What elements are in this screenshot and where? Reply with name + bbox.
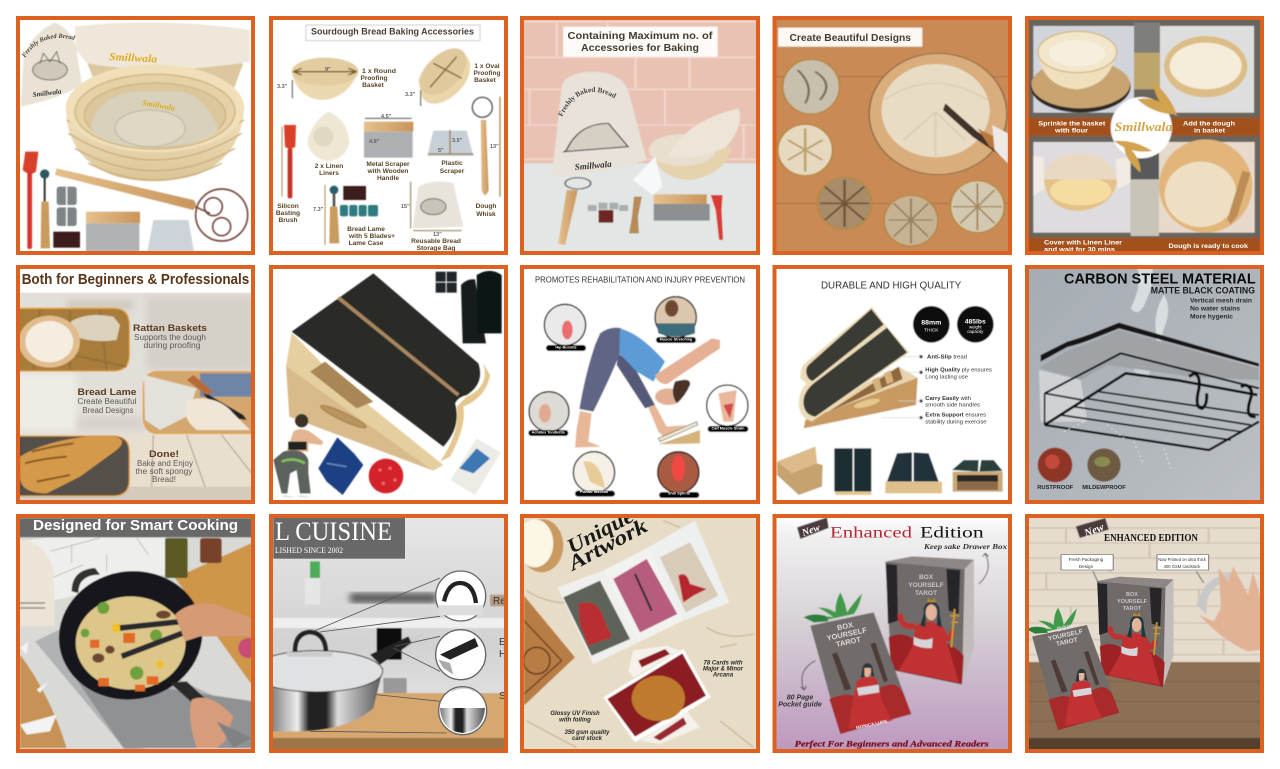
book title: guide: TAROT [835, 635, 862, 649]
callout: rattan baskets: Rattan Baskets [133, 323, 207, 334]
frame [1027, 516, 1262, 751]
labels: product names: 1 x Round [362, 68, 396, 75]
heading second line: Artwork [562, 513, 652, 576]
callout: packaging: Fresh Packaging [1069, 557, 1104, 562]
illustration: tarot box and guide book [772, 514, 1012, 754]
condition labels: Plantar fasciitis [580, 490, 608, 494]
labels: dimensions [277, 67, 499, 238]
callout: rattan baskets: Supports the dough [134, 333, 206, 342]
captions: Sprinkle the basket [1038, 120, 1106, 128]
labels: product names: Basting [276, 210, 300, 217]
annotation: deck [703, 661, 744, 678]
book title: box [908, 574, 944, 597]
callout: card stock: Now Printed on ultra thick [1158, 557, 1207, 562]
panel: four step guide [1024, 16, 1264, 256]
cropped labels: S [499, 691, 506, 702]
cropped labels [493, 596, 506, 702]
badges labels [1037, 485, 1126, 491]
condition labels: Muscle Stretching [660, 337, 693, 341]
labels: product names: Handle [377, 175, 399, 182]
labels: dimensions: 3.3" [277, 84, 288, 90]
labels: product names: with 5 Blades+ [348, 233, 395, 240]
labels: product names: Storage Bag [417, 245, 455, 252]
panel: designed for smart cooking [16, 514, 258, 753]
panel: enhanced edition brick [1025, 514, 1266, 753]
photo: black rack with water [1024, 265, 1264, 505]
book title: box: BOX [1126, 592, 1138, 598]
labels: product names: 1 x Oval [474, 63, 500, 70]
panel: carbon steel shelf [1024, 265, 1264, 505]
frame [522, 516, 758, 751]
frame [774, 18, 1010, 253]
captions: and wait for 30 mins [1044, 246, 1115, 254]
tag: new: New [1082, 521, 1106, 540]
feature list: High Quality ply ensures [925, 368, 992, 374]
frame [1027, 267, 1262, 502]
cropped labels: E [499, 637, 506, 648]
labels: product names: Basket [474, 77, 497, 84]
heading: Designed for Smart Cooking [33, 517, 238, 534]
labels: dimensions: 3.3" [405, 92, 416, 98]
book title: guide: YOURSELF [826, 625, 868, 643]
labels: product names: with Wooden [367, 168, 408, 175]
condition labels: Achilles Tendinitis [532, 430, 565, 434]
photo: board and feature badges [772, 265, 1012, 505]
panel: unique artwork tarot [517, 503, 760, 754]
condition labels: Calf Muscle Strain [712, 426, 745, 430]
label: liner brand: Smillwala [109, 51, 158, 66]
feature list: Carry Easily with [925, 396, 971, 402]
frame [774, 267, 1010, 502]
labels: dimensions: 7.3" [313, 207, 324, 213]
label: bag brand: Smillwala [574, 159, 613, 172]
photos: four steps [1024, 16, 1264, 256]
frame [1027, 18, 1262, 253]
book title: guide: BOX [836, 620, 854, 632]
heading: DURABLE AND HIGH QUALITY [821, 279, 961, 291]
book title: box: BOX [919, 574, 934, 581]
heading: Create Beautiful Designs [790, 33, 911, 44]
badge: 485lbs [965, 318, 986, 334]
annotation: deck: Major & Minor [703, 667, 744, 673]
annotation: guide [778, 695, 822, 709]
annotation: finish [550, 711, 610, 742]
logo: Smillwala [1114, 119, 1173, 134]
labels: product names: 2 x Linen [315, 163, 343, 170]
labels: product names: Reusable Bread [411, 238, 461, 245]
feature text [1190, 297, 1252, 320]
panel: containing maximum accessories [520, 16, 760, 255]
photo: tarot box on wooden table [1025, 514, 1266, 753]
heading: Enhanced [830, 524, 912, 541]
labels: product names: Bread Lame [347, 226, 385, 233]
feature text: More hygenic [1190, 313, 1233, 320]
feature text: Vertical mesh drain [1190, 297, 1252, 304]
annotation: finish: Glossy UV Finish [550, 711, 600, 717]
condition labels: Hip Bursitis [555, 345, 577, 349]
labels: dimensions: 15" [401, 204, 410, 210]
captions [1038, 120, 1248, 254]
condition labels [532, 337, 745, 495]
labels: product names: Metal Scraper [366, 161, 410, 168]
labels: product names: Plastic [441, 160, 463, 167]
heading [568, 32, 712, 53]
feature list: Anti-Slip tread [927, 354, 967, 360]
labels: product names [276, 63, 501, 252]
photo: slant board and accessories [273, 271, 502, 497]
brand name: L CUISINE [275, 517, 392, 546]
book title: guide: YOURSELF [1047, 628, 1084, 643]
callout: rattan baskets [133, 323, 207, 350]
captions: with flour [1054, 128, 1088, 134]
badge: 88mm thick: 88mm [921, 320, 941, 326]
badges labels: RUSTPROOF [1037, 485, 1074, 491]
frame [18, 267, 253, 502]
panel: enhanced edition pink [772, 514, 1012, 754]
subheading: MATTE BLACK COATING [1151, 285, 1255, 296]
badge: 88mm thick [921, 320, 941, 334]
labels: product names: Brush [278, 217, 298, 224]
feature list: Extra Support ensures [925, 413, 986, 419]
book title: box: TAROT [915, 590, 937, 597]
heading: Both for Beginners & Professionals [22, 272, 249, 288]
feature list: smooth side handles [925, 403, 980, 409]
captions: Dough is ready to cook [1168, 243, 1248, 250]
labels: product names: Proofing [360, 75, 388, 82]
book title: guide: BOX [1056, 624, 1072, 634]
labels: product names: Lame Case [349, 240, 384, 247]
condition labels: Shin Splints [668, 491, 690, 495]
labels: product names: Silicon [277, 203, 299, 210]
annotation: finish: with foiling [559, 718, 591, 724]
panel: cookware close-ups [251, 514, 508, 753]
badge: 485lbs: 485lbs [965, 318, 986, 326]
heading: PROMOTES REHABILITATION AND INJURY PREVENTION [535, 274, 745, 284]
frame [271, 516, 506, 751]
annotation: guide: Pocket guide [778, 702, 822, 709]
panel: sourdough accessories [271, 18, 506, 253]
illustration: stretching figure and condition medallions [528, 295, 750, 499]
badge: 88mm thick: THICK [924, 328, 939, 334]
photo: wok with noodles on stove [16, 514, 258, 753]
frame [271, 267, 506, 502]
photo: cards on parchment [517, 514, 760, 754]
panel: durable and high quality [772, 265, 1012, 505]
tagline: Perfect For Beginners and Advanced Readers [795, 738, 990, 748]
callout: done [136, 450, 193, 482]
callout: rattan baskets: during proofing [144, 341, 200, 350]
feature list: Long lasting use [925, 374, 968, 380]
heading: Unique [563, 503, 638, 558]
book title: box: YOURSELF [908, 582, 944, 589]
callout: bread lame: Bread Lame [78, 387, 136, 398]
frame [18, 516, 253, 751]
frame [522, 267, 758, 502]
heading: ENHANCED EDITION [1104, 533, 1198, 544]
photo collage [20, 292, 251, 500]
callout: done: Done! [149, 449, 179, 460]
panel: both for beginners and professionals [16, 265, 255, 505]
heading: Sourdough Bread Baking Accessories [311, 26, 474, 36]
book title: box [1117, 592, 1148, 612]
captions: in basket [1194, 128, 1226, 134]
cropped labels: Re [493, 596, 506, 607]
photo: scored loaves on wood [773, 16, 1014, 256]
book title: guide: TAROT [1055, 637, 1078, 648]
heading: Accessories for Baking [581, 42, 699, 54]
photo: dimensioned accessories [282, 25, 500, 245]
label: bag brand: Smillwala [32, 87, 62, 99]
callout: packaging [1069, 557, 1104, 569]
labels: product names: Whisk [476, 211, 496, 218]
frame [18, 18, 253, 253]
feature text: No water stains [1190, 305, 1240, 312]
heading second word: Edition [920, 524, 984, 541]
cropped labels: H [499, 649, 506, 660]
labels: dimensions: 3.5" [452, 138, 463, 144]
captions: Cover with Linen Liner [1044, 240, 1122, 246]
frame [522, 18, 758, 253]
callout: packaging: Design [1079, 564, 1094, 569]
label: inner liner brand: Smillwala [142, 98, 176, 113]
annotation: deck: 78 Cards with [703, 661, 743, 667]
labels: product names: Scraper [440, 168, 465, 175]
panel: create beautiful designs [773, 16, 1014, 256]
heading: CARBON STEEL MATERIAL [1064, 270, 1256, 287]
book title: box: TAROT [1123, 606, 1142, 612]
author: MONICA LUPE [856, 719, 888, 730]
tag: new: New [800, 522, 822, 539]
panel: bread basket kit hero [16, 16, 255, 255]
panel: rehabilitation and injury prevention [520, 265, 760, 505]
heading: Containing Maximum no. of [568, 30, 713, 42]
labels: dimensions: 4.5" [381, 114, 392, 120]
label: bag text: Freshly Baked Bread [22, 34, 76, 58]
photo: baskets, bag and tools [21, 22, 250, 252]
photo: bag and tools on table [520, 16, 761, 255]
callout: card stock [1158, 557, 1207, 569]
book title: box: YOURSELF [1117, 599, 1148, 605]
photo: wok with lid and detail loupes [251, 514, 508, 753]
annotation: guide: 80 Page [787, 695, 813, 702]
feature list [925, 354, 992, 425]
annotation: deck: Arcana [712, 672, 734, 678]
annotation: finish: card stock [572, 736, 603, 742]
frame [271, 18, 506, 253]
callout: bread lame: Create Beautiful [78, 397, 137, 406]
labels: product names: Liners [319, 170, 339, 177]
callout: bread lame [78, 387, 137, 415]
book title: guide [824, 617, 870, 651]
badge: 485lbs: capacity [967, 329, 984, 334]
captions: Add the dough [1183, 120, 1235, 128]
callout: bread lame: Bread Designs [82, 406, 134, 415]
labels: dimensions: 5" [438, 148, 444, 154]
labels: product names: Dough [476, 203, 496, 210]
callout: done: Bake and Enjoy [137, 459, 193, 468]
book title: guide [1046, 622, 1085, 650]
badge: 485lbs: weight [969, 325, 982, 330]
feature list: stability during exercise [925, 419, 987, 425]
panel: slant board kit [271, 267, 506, 502]
labels: dimensions: 9" [325, 67, 331, 73]
callout: done: Bread! [152, 475, 176, 484]
tagline: LISHED SINCE 2002 [275, 546, 343, 555]
labels: dimensions: 13" [490, 144, 499, 150]
callout: card stock: 400 GSM cardstock [1164, 564, 1201, 569]
annotation: finish: 350 gsm quality [564, 730, 610, 736]
frame [774, 516, 1010, 751]
labels: dimensions: 4.9" [369, 139, 380, 145]
callout: done: the soft spongy [136, 467, 193, 476]
labels: dimensions: 13" [433, 232, 442, 238]
labels: product names: Proofing [473, 70, 501, 77]
badges labels: MILDEWPROOF [1082, 485, 1126, 491]
annotation: box: Keep sake Drawer Box [923, 543, 1008, 551]
label: bag text: Freshly Baked Bread [558, 86, 616, 117]
labels: product names: Basket [362, 82, 385, 89]
